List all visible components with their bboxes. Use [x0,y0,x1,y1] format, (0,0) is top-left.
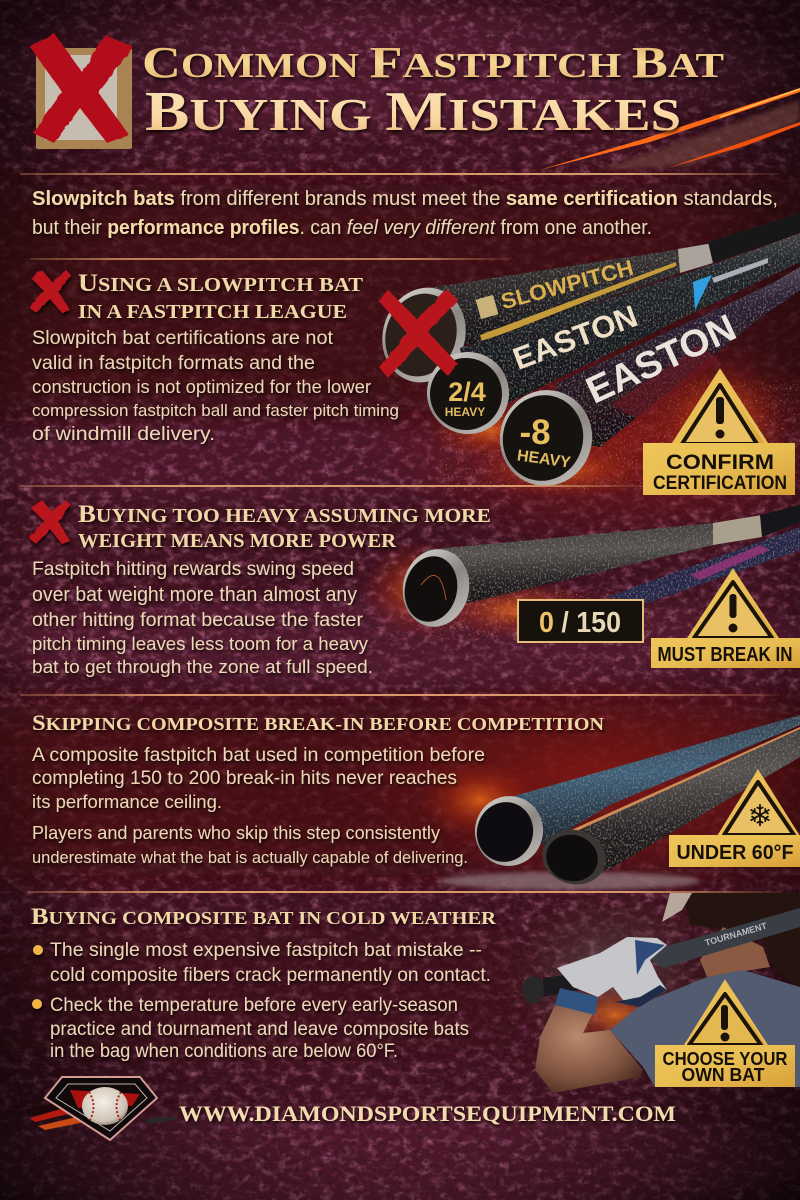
bat: slowpitch: SLOWPITCH [498,255,636,314]
heading: SKIPPING COMPOSITE BREAK-IN BEFORE COMPETITION [32,710,604,735]
body: pitch timing leaves less toom for a heavy [32,633,369,654]
heading: BUYING COMPOSITE BAT IN COLD WEATHER [31,904,497,929]
panel: mistake 4 text [31,904,497,1062]
icon: red X on bat [378,289,458,378]
warning sign: must break in [651,570,800,668]
panel: mistake 4 player [505,890,800,1093]
bat: easton -8: EASTON [580,307,743,413]
logo: diamond baseball [25,1077,175,1140]
title: BUYING MISTAKES [145,81,681,143]
body: completing 150 to 200 break-in hits never reaches [32,767,457,789]
panel: mistake 2 bats [360,505,800,642]
icon: red X [29,270,71,313]
bat: purple highlight [690,545,770,580]
warning sign: under 60F [669,771,800,867]
body [32,328,399,445]
bullet 2: in the bag when conditions are below 60°F. [50,1041,398,1062]
bullet 2 [32,995,469,1062]
heading: BUYING TOO HEAVY ASSUMING MORE [78,501,491,528]
counter: 0 / 150: 0 / 150 [539,607,621,639]
counter: 0 / 150 [518,600,643,642]
bat: easton -8: -8 [519,413,551,452]
bat: frosted blue [467,715,800,874]
panel: mistake 4 player: TOURNAMENT [704,921,768,948]
heading [78,270,364,323]
bullet 1: cold composite fibers crack permanently on contact. [50,964,491,986]
icon: clipboard with red X [30,33,133,149]
heading: IN A FASTPITCH LEAGUE [78,301,347,323]
body: Players and parents who skip this step consistently [32,823,440,843]
website url: WWW.DIAMONDSPORTSEQUIPMENT.COM [179,1101,676,1126]
player: hair and head [682,893,800,990]
panel: mistake 2 text [29,500,491,677]
fire streaks [536,88,800,171]
body: bat to get through the zone at full speed. [32,656,373,677]
panel: mistake 1 text [29,270,399,445]
panel: mistake 1 bats [370,213,800,500]
body: compression fastpitch ball and faster pitch timing [32,401,399,420]
bat: slowpitch [370,213,800,393]
bat: easton 2/4 [418,233,800,443]
icon: red X [29,500,71,544]
body: Slowpitch bat certifications are not [32,328,334,349]
bat: purple [607,527,800,603]
player: bat [643,908,800,968]
player: wrist band [555,988,598,1015]
bat: easton 2/4: HEAVY [445,405,485,419]
bullet 2: Check the temperature before every early-season [50,995,458,1016]
heading [78,501,491,552]
bat: worn grey [396,505,800,633]
body: its performance ceiling. [32,792,222,812]
bat: dark grey [536,727,800,891]
body: construction is not optimized for the lower [32,377,371,397]
warning sign: choose your own bat: OWN BAT [682,1065,764,1085]
player: gloves [557,937,667,1007]
icon: snowflake: ❄ [747,799,773,834]
body: of windmill delivery. [32,424,215,445]
player: shirt [610,970,800,1087]
warning sign: under 60F: UNDER 60°F [676,842,794,864]
warning sign: confirm certification: CERTIFICATION [653,473,787,494]
bat: easton -8 [489,267,800,496]
player: arm [535,1005,643,1093]
player: neck [700,927,770,977]
intro text: but their performance profiles. can feel very different from one another. [32,217,652,239]
intro text [32,188,778,239]
heading: WEIGHT MEANS MORE POWER [78,530,397,552]
body: A composite fastpitch bat used in competition before [32,744,485,766]
warning sign: confirm certification: CONFIRM [666,451,774,474]
bullet 1: The single most expensive fastpitch bat mistake -- [50,939,482,961]
panel: mistake 3 bats [420,715,800,891]
warning sign: confirm certification [643,371,795,495]
body: underestimate what the bat is actually capable of delivering. [32,849,468,867]
bat: easton 2/4: 2/4 [448,377,486,407]
title: COMMON FASTPITCH BAT [142,38,724,87]
body: over bat weight more than almost any [32,584,357,606]
body [32,744,485,867]
player: hat brim [662,893,692,922]
title [142,38,724,143]
bat: easton 2/4: EASTON [508,298,642,377]
panel: mistake 3 text [32,710,604,867]
body: Fastpitch hitting rewards swing speed [32,558,354,580]
bullet 2: practice and tournament and leave composite bats [50,1018,469,1040]
heading: USING A SLOWPITCH BAT [78,270,364,297]
warning sign: choose your own bat: CHOOSE YOUR [662,1049,788,1069]
intro text: Slowpitch bats from different brands must meet the same certification standards, [32,188,778,210]
bullet 1 [33,939,491,986]
body: valid in fastpitch formats and the [32,353,315,374]
body [32,558,373,677]
bat: easton -8: HEAVY [516,447,572,472]
body: other hitting format because the faster [32,610,364,631]
warning sign: choose your own bat [655,981,795,1087]
